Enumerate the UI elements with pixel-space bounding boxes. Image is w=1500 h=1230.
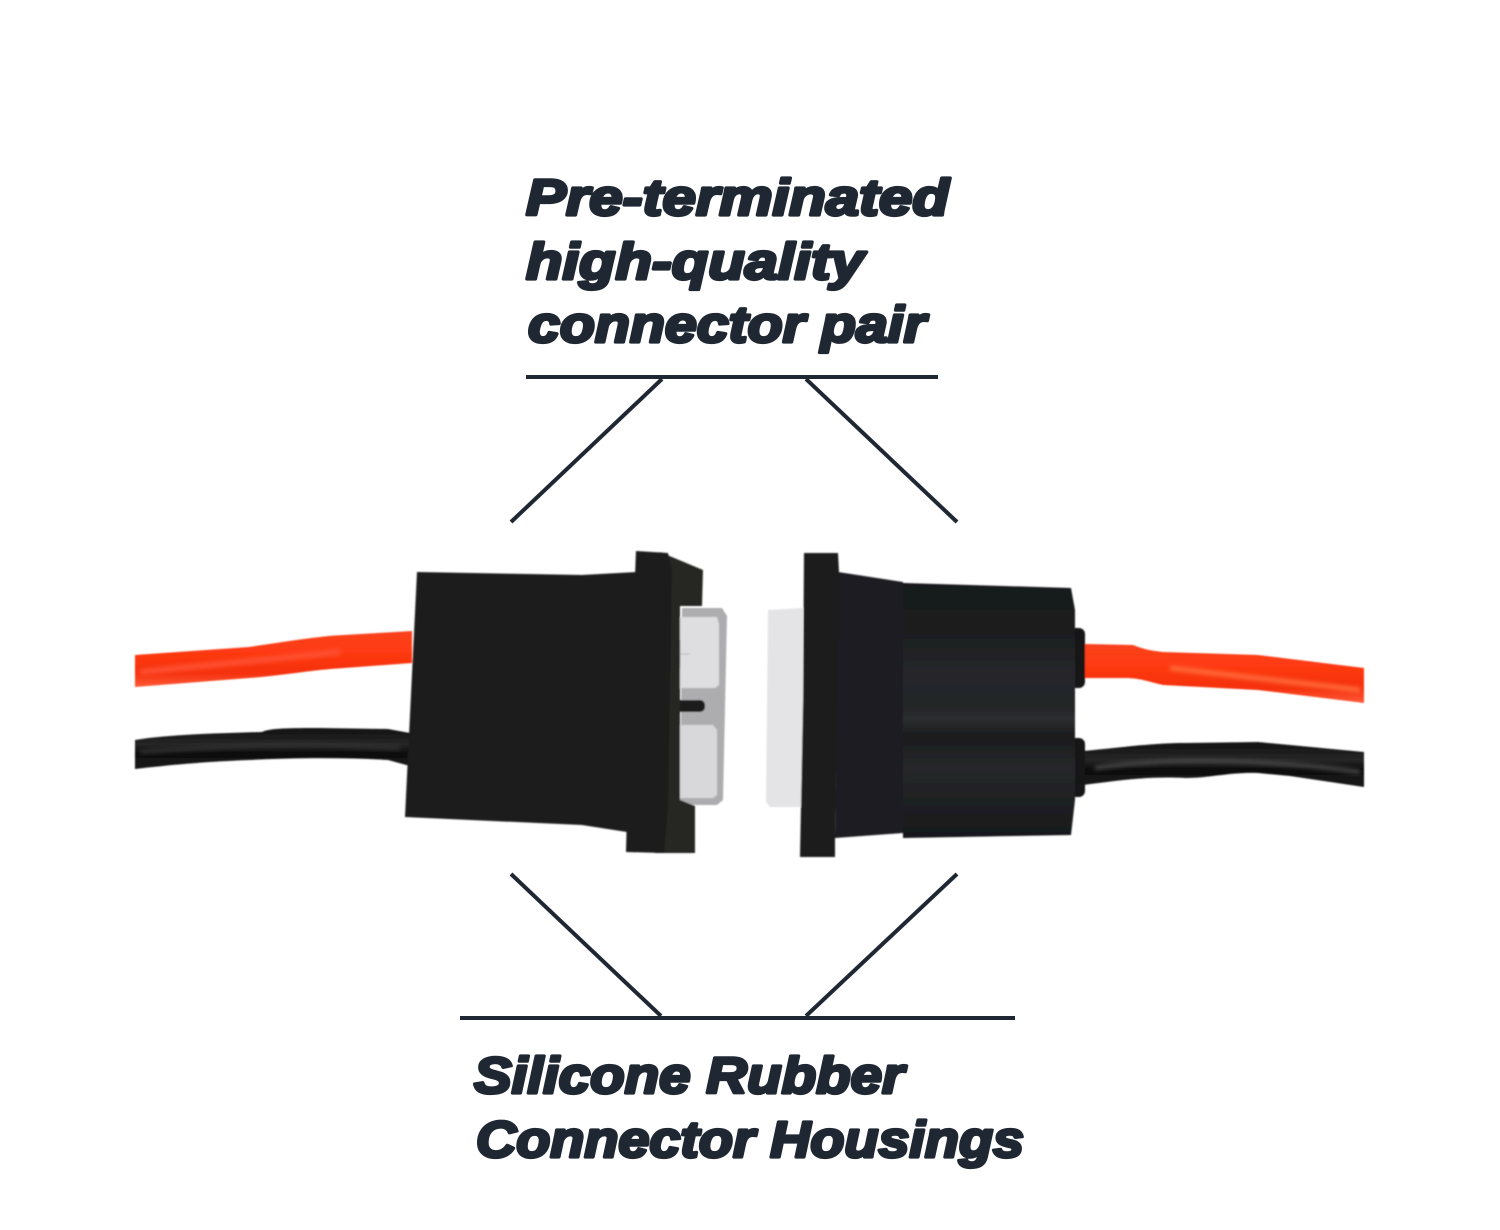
heading: silicone rubber connector housings: [474, 1047, 1024, 1168]
left red wire: [135, 631, 412, 687]
heading: silicone rubber connector housings: Silicone Rubber: [474, 1047, 907, 1104]
heading: pre-terminated connector pair: high-quality: [526, 233, 867, 290]
right connector with wires: [766, 553, 1364, 857]
left connector with wires: [135, 551, 727, 853]
wire highlights: [140, 652, 1360, 772]
right mid housing: [835, 572, 903, 838]
left housing: [405, 572, 637, 832]
right rear housing: [903, 583, 1075, 838]
right grey plug: [766, 608, 803, 807]
left flange front: [626, 551, 672, 853]
bottom callout lines: [460, 874, 1015, 1018]
right red wire: [1085, 644, 1364, 703]
top callout lines: [511, 377, 957, 522]
right flange: [800, 553, 839, 857]
left flange side: [655, 552, 703, 853]
right nubs: [1070, 628, 1085, 797]
right black wire: [1083, 742, 1364, 787]
heading: silicone rubber connector housings: Connector Housings: [476, 1111, 1024, 1168]
heading: pre-terminated connector pair: [526, 169, 951, 353]
left grey plug: [670, 608, 727, 805]
heading: pre-terminated connector pair: Pre-terminated: [526, 169, 951, 226]
heading: pre-terminated connector pair: connector pair: [528, 296, 930, 353]
left black wire: [135, 728, 410, 769]
